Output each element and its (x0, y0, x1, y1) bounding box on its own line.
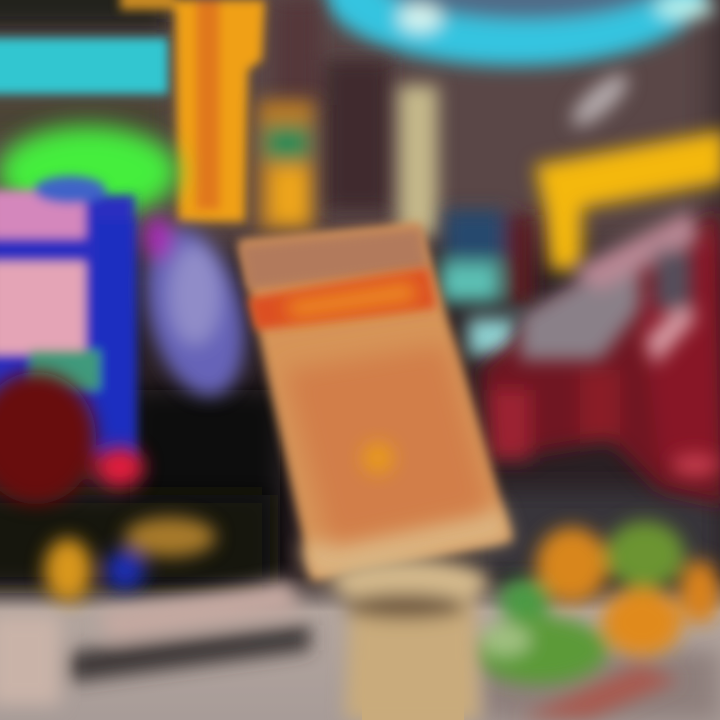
blue and pink display, left (0, 176, 137, 460)
receipt orange strip in band (285, 282, 418, 318)
receipt held in hand (238, 222, 512, 580)
dark red blob, lower left (0, 372, 144, 504)
receipt centre spot (362, 442, 394, 474)
small objects, lower left (44, 517, 216, 602)
wrist fading into the bottom edge (362, 660, 464, 720)
cyan light band, top left (0, 38, 168, 94)
yellow gantry, right (535, 130, 720, 270)
receipt paper (238, 222, 512, 580)
lavender oval display (130, 216, 260, 407)
receipt light border (300, 505, 512, 580)
floor stripes, lower left (0, 580, 310, 705)
fruit pile, lower right (472, 521, 720, 718)
orange column (120, 0, 265, 222)
bottle behind receipt (258, 85, 438, 235)
palm and fingers (330, 558, 490, 720)
grey-pink panels, right (520, 210, 719, 477)
receipt red band (248, 268, 436, 330)
green glow (0, 126, 178, 218)
receipt body print (285, 345, 490, 545)
dark red machines, right (480, 210, 720, 505)
receipt header (240, 228, 428, 290)
teal display behind receipt (440, 210, 535, 356)
hand holding the receipt (330, 558, 490, 720)
ceiling details (275, 0, 635, 210)
cyan ring light, top right (325, 0, 715, 66)
